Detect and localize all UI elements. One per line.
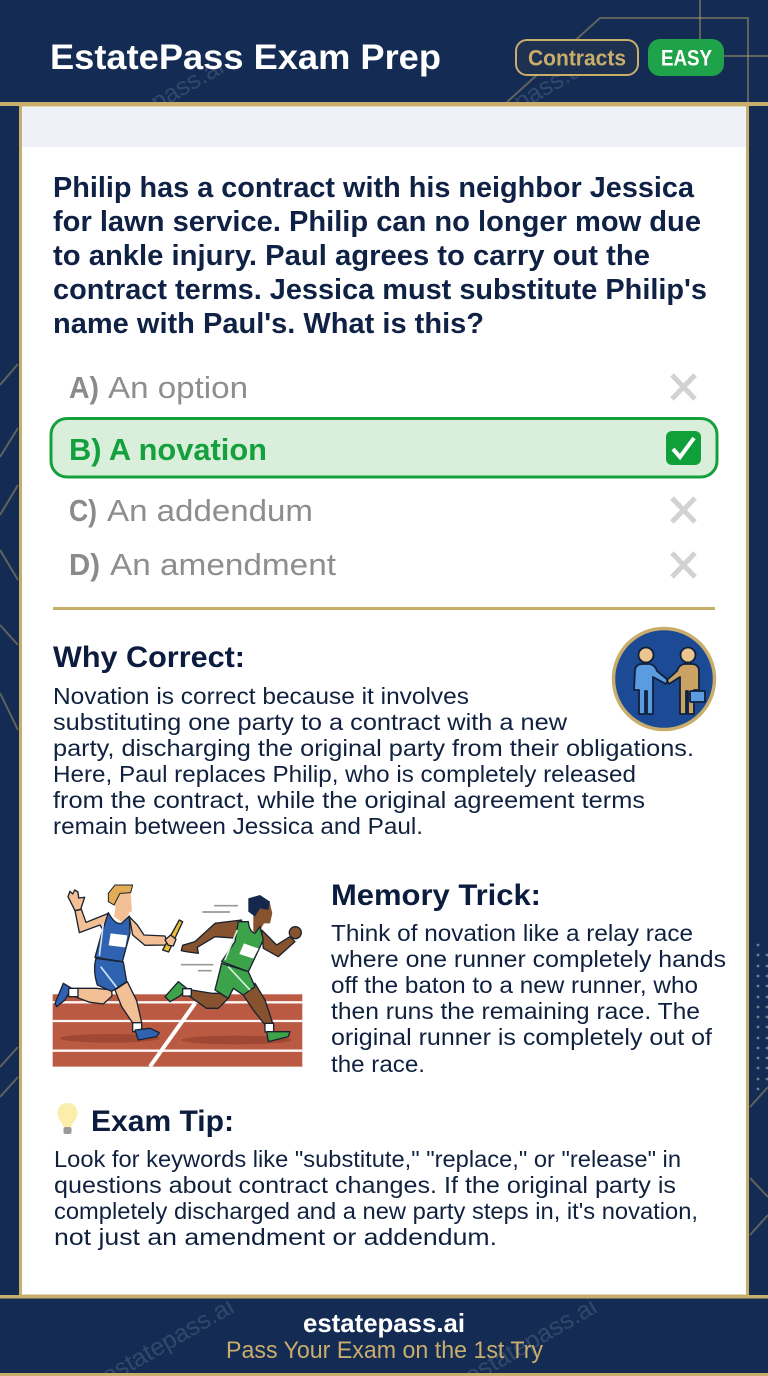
exam tip body: questions about contract changes. If the original party is — [54, 1172, 676, 1198]
exam tip body — [54, 1146, 698, 1250]
why correct body: Here, Paul replaces Philip, who is completely released — [53, 761, 636, 787]
memory trick body: off the baton to a new runner, who — [331, 972, 698, 998]
memory trick body — [330, 920, 726, 1077]
memory trick body: Think of novation like a relay race — [331, 920, 693, 946]
divider — [53, 607, 715, 610]
option C: An addendum — [107, 493, 313, 528]
option C: C) — [69, 493, 97, 528]
option D — [69, 547, 695, 582]
icon: light bulb — [58, 1103, 78, 1134]
option B correct: B) A novation — [69, 432, 267, 467]
category badge — [516, 40, 638, 75]
question text: for lawn service. Philip can no longer mow due — [53, 206, 701, 238]
option A: A) — [69, 370, 99, 405]
why correct body: Novation is correct because it involves — [53, 683, 469, 709]
why correct heading: Why Correct: — [53, 641, 245, 674]
memory trick body: where one runner completely hands — [330, 946, 726, 972]
question text: name with Paul's. What is this? — [53, 308, 484, 340]
footer tagline: Pass Your Exam on the 1st Try — [226, 1337, 543, 1364]
question text: Philip has a contract with his neighbor Jessica — [53, 172, 695, 204]
illustration: relay race — [53, 885, 302, 1067]
category badge: Contracts — [528, 46, 626, 70]
green runner — [165, 895, 301, 1042]
memory trick body: the race. — [331, 1051, 425, 1077]
exam tip body: not just an amendment or addendum. — [54, 1224, 497, 1250]
header watermarks — [87, 52, 592, 150]
why correct body: from the contract, while the original agreement terms — [53, 787, 645, 813]
speed lines — [181, 906, 238, 971]
question text — [53, 172, 707, 340]
exam tip body: completely discharged and a new party steps in, it's novation, — [54, 1198, 698, 1224]
header — [50, 38, 724, 150]
footer watermarks — [97, 1292, 602, 1376]
difficulty badge — [648, 39, 724, 76]
running track — [53, 994, 302, 1067]
option C — [69, 493, 695, 528]
header title: EstatePass Exam Prep — [50, 38, 441, 77]
why correct body — [53, 683, 694, 839]
exam tip body: Look for keywords like "substitute," "replace," or "release" in — [54, 1146, 681, 1172]
icon: green check — [666, 431, 701, 465]
header gold rule — [0, 102, 768, 106]
why correct body: substituting one party to a contract with a new — [53, 709, 568, 735]
why correct body: remain between Jessica and Paul. — [53, 813, 423, 839]
option A: An option — [108, 370, 248, 405]
footer site name: estatepass.ai — [303, 1308, 465, 1338]
memory trick heading: Memory Trick: — [331, 879, 541, 912]
option A — [69, 370, 695, 405]
option B correct — [51, 418, 717, 477]
memory trick body: original runner is completely out of — [331, 1024, 712, 1050]
difficulty badge: EASY — [661, 46, 712, 70]
memory trick body: then runs the remaining race. The — [331, 998, 700, 1024]
footer — [0, 1292, 768, 1376]
option D: An amendment — [110, 547, 336, 582]
exam tip heading: Exam Tip: — [91, 1105, 234, 1138]
icon: handshake badge — [614, 628, 714, 730]
blue runner — [55, 885, 183, 1040]
option D: D) — [69, 547, 100, 582]
question text: to ankle injury. Paul agrees to carry out the — [53, 240, 650, 272]
header watermarks: estatepass.ai — [87, 52, 229, 150]
decorative dots — [757, 944, 768, 1090]
question text: contract terms. Jessica must substitute Philip's — [53, 274, 707, 306]
why correct body: party, discharging the original party from their obligations. — [53, 735, 694, 761]
header watermarks: estatepass.ai — [450, 52, 592, 150]
